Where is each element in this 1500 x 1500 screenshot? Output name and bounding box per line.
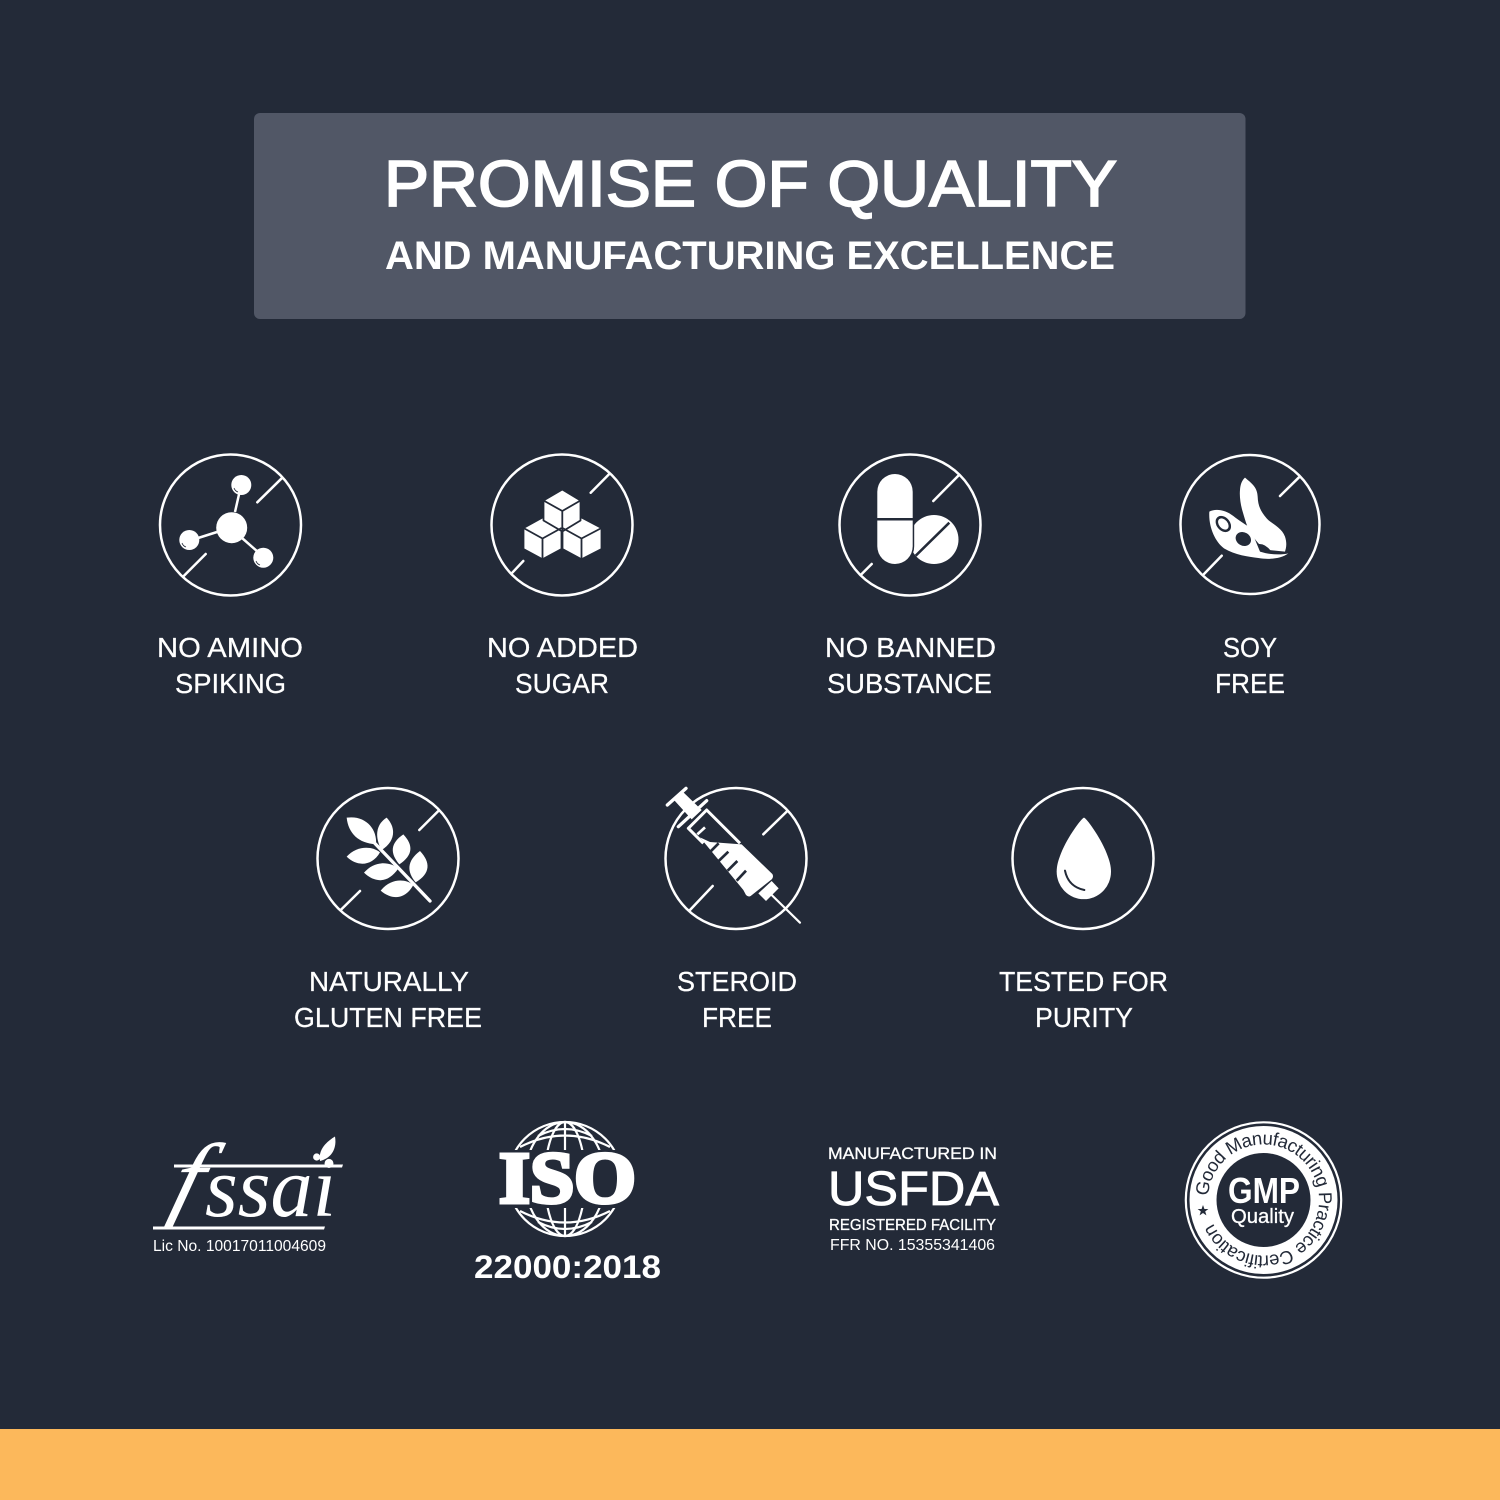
label: SUGAR: [515, 668, 609, 699]
subtitle: AND MANUFACTURING EXCELLENCE: [385, 234, 1115, 278]
logo: fssai: f: [157, 1124, 233, 1240]
logo: ISO 22000:2018: 22000:2018: [474, 1249, 661, 1285]
logo: USFDA: FFR NO. 15355341406: [830, 1237, 995, 1254]
label: [677, 966, 797, 1033]
icon: water drop: [1012, 788, 1154, 929]
label: [825, 632, 996, 699]
panel: title banner: [254, 113, 1246, 319]
label: [487, 632, 638, 699]
icon: syringe crossed out: [666, 788, 806, 929]
logo: USFDA: [828, 1145, 999, 1254]
item: steroid free: [666, 788, 806, 1033]
label: NO BANNED: [825, 632, 996, 663]
label: [157, 632, 303, 699]
label: STEROID: [677, 966, 797, 997]
label: NATURALLY: [309, 966, 469, 997]
item: no added sugar: [487, 454, 638, 699]
icon: sugar cubes crossed out: [492, 454, 632, 596]
icon: pills crossed out: [840, 454, 980, 596]
icon: soy pod crossed out: [1180, 455, 1320, 594]
label: FREE: [1215, 668, 1285, 699]
label: PURITY: [1035, 1002, 1133, 1033]
label: NO AMINO: [157, 632, 303, 663]
item: no amino spiking: [157, 454, 303, 699]
icon: globe top: [514, 1120, 616, 1150]
title: PROMISE OF QUALITY: [384, 147, 1117, 220]
logo: USFDA: REGISTERED FACILITY: [829, 1217, 996, 1234]
item: tested for purity: [999, 788, 1168, 1033]
logo: GMP badge: GMP: [1228, 1170, 1300, 1211]
logo: USFDA: USFDA: [828, 1163, 999, 1216]
logo: GMP badge: Good Manufacturing Practice Certification: [1196, 1132, 1332, 1268]
logo: fssai: ssai: [205, 1139, 336, 1235]
logo: fssai: Lic No. 10017011004609: [153, 1238, 326, 1255]
item: naturally gluten free: [294, 788, 482, 1033]
label: SOY: [1223, 632, 1277, 663]
bottom accent bar: [0, 1429, 1500, 1500]
logo: fssai: [153, 1136, 343, 1251]
label: [294, 966, 482, 1033]
label: SUBSTANCE: [827, 668, 992, 699]
item: soy free: [1180, 455, 1320, 699]
label: NO ADDED: [487, 632, 638, 663]
item: no banned substance: [825, 454, 996, 699]
icon: wheat crossed out: [318, 788, 458, 929]
label: [999, 966, 1168, 1033]
logo: USFDA: MANUFACTURED IN: [828, 1145, 997, 1163]
label: TESTED FOR: [999, 966, 1168, 997]
logo: ISO 22000:2018: [474, 1122, 661, 1285]
logo: GMP badge: Quality: [1231, 1206, 1294, 1228]
logo: ISO 22000:2018: ISO: [499, 1138, 636, 1218]
label: [1215, 632, 1285, 699]
icon: molecule crossed out: [160, 454, 301, 596]
label: SPIKING: [175, 668, 286, 699]
label: GLUTEN FREE: [294, 1002, 482, 1033]
label: FREE: [702, 1002, 772, 1033]
icon: globe bottom: [514, 1208, 616, 1238]
